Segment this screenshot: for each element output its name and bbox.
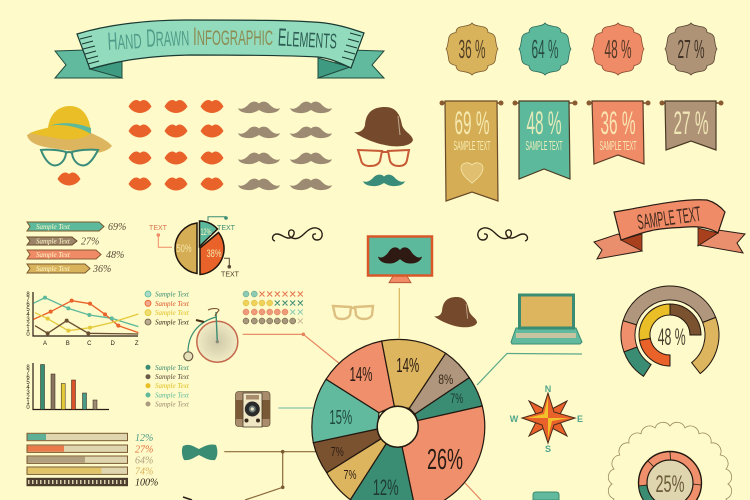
line chart: 7: [26, 297, 30, 303]
connector: bow tie to wheel: [224, 450, 316, 500]
legend: bar chart: Sample Text: [155, 400, 190, 408]
badge: 64 percent: [519, 23, 571, 75]
icon: bow tie: [182, 444, 217, 460]
icon: compass: W: [510, 414, 519, 424]
badge: 48 percent: 48 %: [604, 34, 632, 64]
hanging banner: 27 percent: [660, 100, 724, 150]
slice: 14 percent mustard: [382, 339, 446, 408]
arrow bar chart: 27%: [81, 236, 99, 248]
wheel labels: 7%: [450, 390, 463, 406]
icon: camera: [236, 392, 270, 427]
line chart: 3: [26, 317, 30, 323]
wheel labels: 8%: [438, 371, 453, 387]
badge: 36 percent: [446, 23, 498, 75]
wheel labels: 12%: [373, 475, 399, 500]
small pie chart: 12%: [200, 227, 212, 237]
badge: 27 percent: 27 %: [678, 34, 704, 64]
icon: bowler hat: [434, 297, 477, 327]
wheel labels: 14%: [396, 355, 419, 377]
icon: monitor with mustache: [368, 236, 432, 283]
title text: HAND: [107, 26, 142, 56]
line chart: 8: [26, 292, 30, 298]
line chart: 6: [26, 302, 30, 308]
icon: glasses: [333, 306, 373, 319]
hanging banner: 69 percent: SAMPLE TEXT: [454, 138, 491, 153]
badge: 27 percent: [665, 23, 717, 75]
slice: 14 percent salmon: [326, 341, 394, 413]
decorative flourish: right: [478, 228, 527, 241]
legend: line chart: Sample Text: [155, 300, 190, 308]
wheel labels: 7%: [344, 467, 357, 482]
legend: line chart: Sample Text: [155, 290, 190, 298]
icon: penny-farthing bicycle: [184, 308, 238, 362]
slice: 7 percent mustard: [327, 438, 386, 500]
arrow bar chart: 69%: [108, 222, 126, 233]
icon: laptop: [511, 295, 582, 344]
legend: bar chart: Sample Text: [155, 392, 190, 400]
semicircular donut chart: [621, 286, 719, 376]
icon: heart: [461, 163, 483, 183]
bar chart: 1: [26, 400, 30, 406]
slice: 8 percent taupe: [409, 353, 469, 414]
icon: compass: [510, 384, 583, 454]
bar chart: 6: [26, 375, 30, 381]
hanging banner: 36 percent: [586, 100, 650, 164]
legend: bar chart: [146, 364, 190, 408]
line chart: 5: [26, 307, 30, 313]
connector: wheel to lower right: [465, 483, 481, 500]
line chart: A: [43, 341, 47, 347]
bar chart: 0: [26, 405, 30, 411]
lips grid: [128, 100, 224, 190]
donut value: 48 %: [658, 324, 686, 351]
progress bars: 12%: [135, 433, 153, 444]
hanging banner: 48 percent: 48 %: [526, 105, 562, 141]
title text: DRAWN: [146, 23, 190, 53]
callout: bottom label: TEXT: [221, 272, 240, 278]
arrow bar chart: 48%: [106, 250, 124, 261]
slice: 7 percent brown: [313, 429, 382, 473]
hanging banner: 27 percent: 27 %: [674, 105, 708, 141]
icon: compass: N: [545, 384, 551, 394]
legend: bar chart: Sample Text: [155, 364, 190, 372]
stray dark mark at bottom edge: [183, 497, 192, 500]
small pie chart: [149, 216, 240, 278]
legend: line chart: [145, 290, 190, 326]
outer ring: [621, 286, 719, 376]
line chart: 4: [26, 312, 30, 318]
center hole: [377, 406, 418, 447]
badge: 48 percent: [592, 23, 644, 75]
wheel labels: 15%: [329, 407, 352, 429]
slice: 26 percent salmon: [402, 406, 485, 500]
hanging banner: 48 percent: [512, 100, 578, 179]
percentage ring: 25 percent: 25%: [656, 471, 684, 498]
line chart: 2: [26, 322, 30, 328]
title text: INFOGRAPHIC: [193, 23, 273, 51]
connector: camera to wheel: [278, 407, 313, 409]
small pie chart: 50%: [176, 243, 192, 255]
progress bars: 27%: [135, 444, 153, 456]
line chart: 0: [26, 332, 30, 338]
badge: 64 percent: 64 %: [532, 34, 558, 64]
callout: top label: TEXT: [217, 225, 236, 232]
line chart: C: [87, 341, 92, 347]
progress bars: 64%: [135, 456, 153, 466]
mustache grid: [238, 102, 332, 190]
line chart: D: [111, 341, 116, 347]
rating dots and crosses: [243, 291, 303, 324]
progress bars: 100%: [135, 478, 158, 488]
wheel labels: 14%: [350, 364, 373, 386]
slice: 7 percent dark green: [415, 378, 482, 421]
sample text ribbon: [594, 200, 745, 259]
legend: bar chart: Sample Text: [155, 382, 190, 390]
badge: 36 percent: 36 %: [458, 34, 486, 64]
progress bars: [27, 433, 158, 488]
arrow bar chart: Sample Text: [36, 223, 71, 231]
percentage ring: 25 percent: [638, 452, 702, 500]
icon: tablet: [533, 492, 559, 500]
line chart: Z: [135, 341, 139, 347]
connector: laptop to wheel: [477, 354, 582, 385]
bar chart: 8: [26, 365, 30, 371]
small pie chart: 38%: [206, 248, 222, 260]
inner ring: [639, 304, 701, 366]
hanging banner: 36 percent: 36 %: [600, 105, 636, 141]
legend: line chart: Sample Text: [155, 309, 190, 317]
percentage badges: [446, 23, 717, 75]
line chart: [26, 292, 139, 347]
icon: woman with sun hat: [27, 106, 112, 186]
wheel labels: [329, 355, 463, 500]
line chart: 1: [26, 327, 30, 333]
connector: bicycle to wheel: [243, 332, 340, 364]
bar chart: 2: [26, 395, 30, 401]
hanging banner: 69 percent: 69 %: [454, 105, 490, 141]
line chart: B: [66, 341, 70, 347]
progress bars: 74%: [135, 466, 153, 478]
icon: compass: E: [577, 414, 583, 424]
connector: monitor to wheel: [398, 288, 400, 338]
bar chart: 5: [26, 380, 30, 386]
title text: ELEMENTS: [277, 23, 338, 55]
legend: line chart: Sample Text: [155, 318, 190, 326]
decorative flourish: left: [273, 228, 322, 241]
wheel chart: [312, 339, 485, 500]
arrow bar chart: Sample Text: [36, 238, 71, 246]
slice: 15 percent teal: [312, 379, 379, 443]
wheel labels: 7%: [331, 444, 344, 459]
hanging banner: 36 percent: SAMPLE TEXT: [600, 138, 637, 153]
hanging banner: 69 percent: [440, 100, 504, 201]
scalloped frame: [608, 422, 732, 500]
bar chart: 4: [26, 385, 30, 391]
icon: compass: S: [545, 444, 551, 454]
title text: [107, 23, 338, 56]
arrow bar chart: Sample Text: [36, 265, 71, 273]
slice: 12 percent dark green: [350, 444, 416, 500]
title ribbon: [55, 20, 384, 78]
bar chart: [26, 363, 109, 411]
arrow bar chart: 36%: [92, 264, 111, 275]
arrow bar chart: [27, 222, 126, 275]
icon: man with bowler hat: [354, 107, 413, 186]
callout: left label: TEXT: [149, 225, 168, 232]
wheel labels: 26%: [427, 444, 463, 476]
arrow bar chart: Sample Text: [36, 251, 71, 259]
bar chart: 3: [26, 390, 30, 396]
legend: bar chart: Sample Text: [155, 373, 190, 381]
hanging banner: 48 percent: SAMPLE TEXT: [526, 138, 563, 153]
bar chart: 7: [26, 370, 30, 376]
